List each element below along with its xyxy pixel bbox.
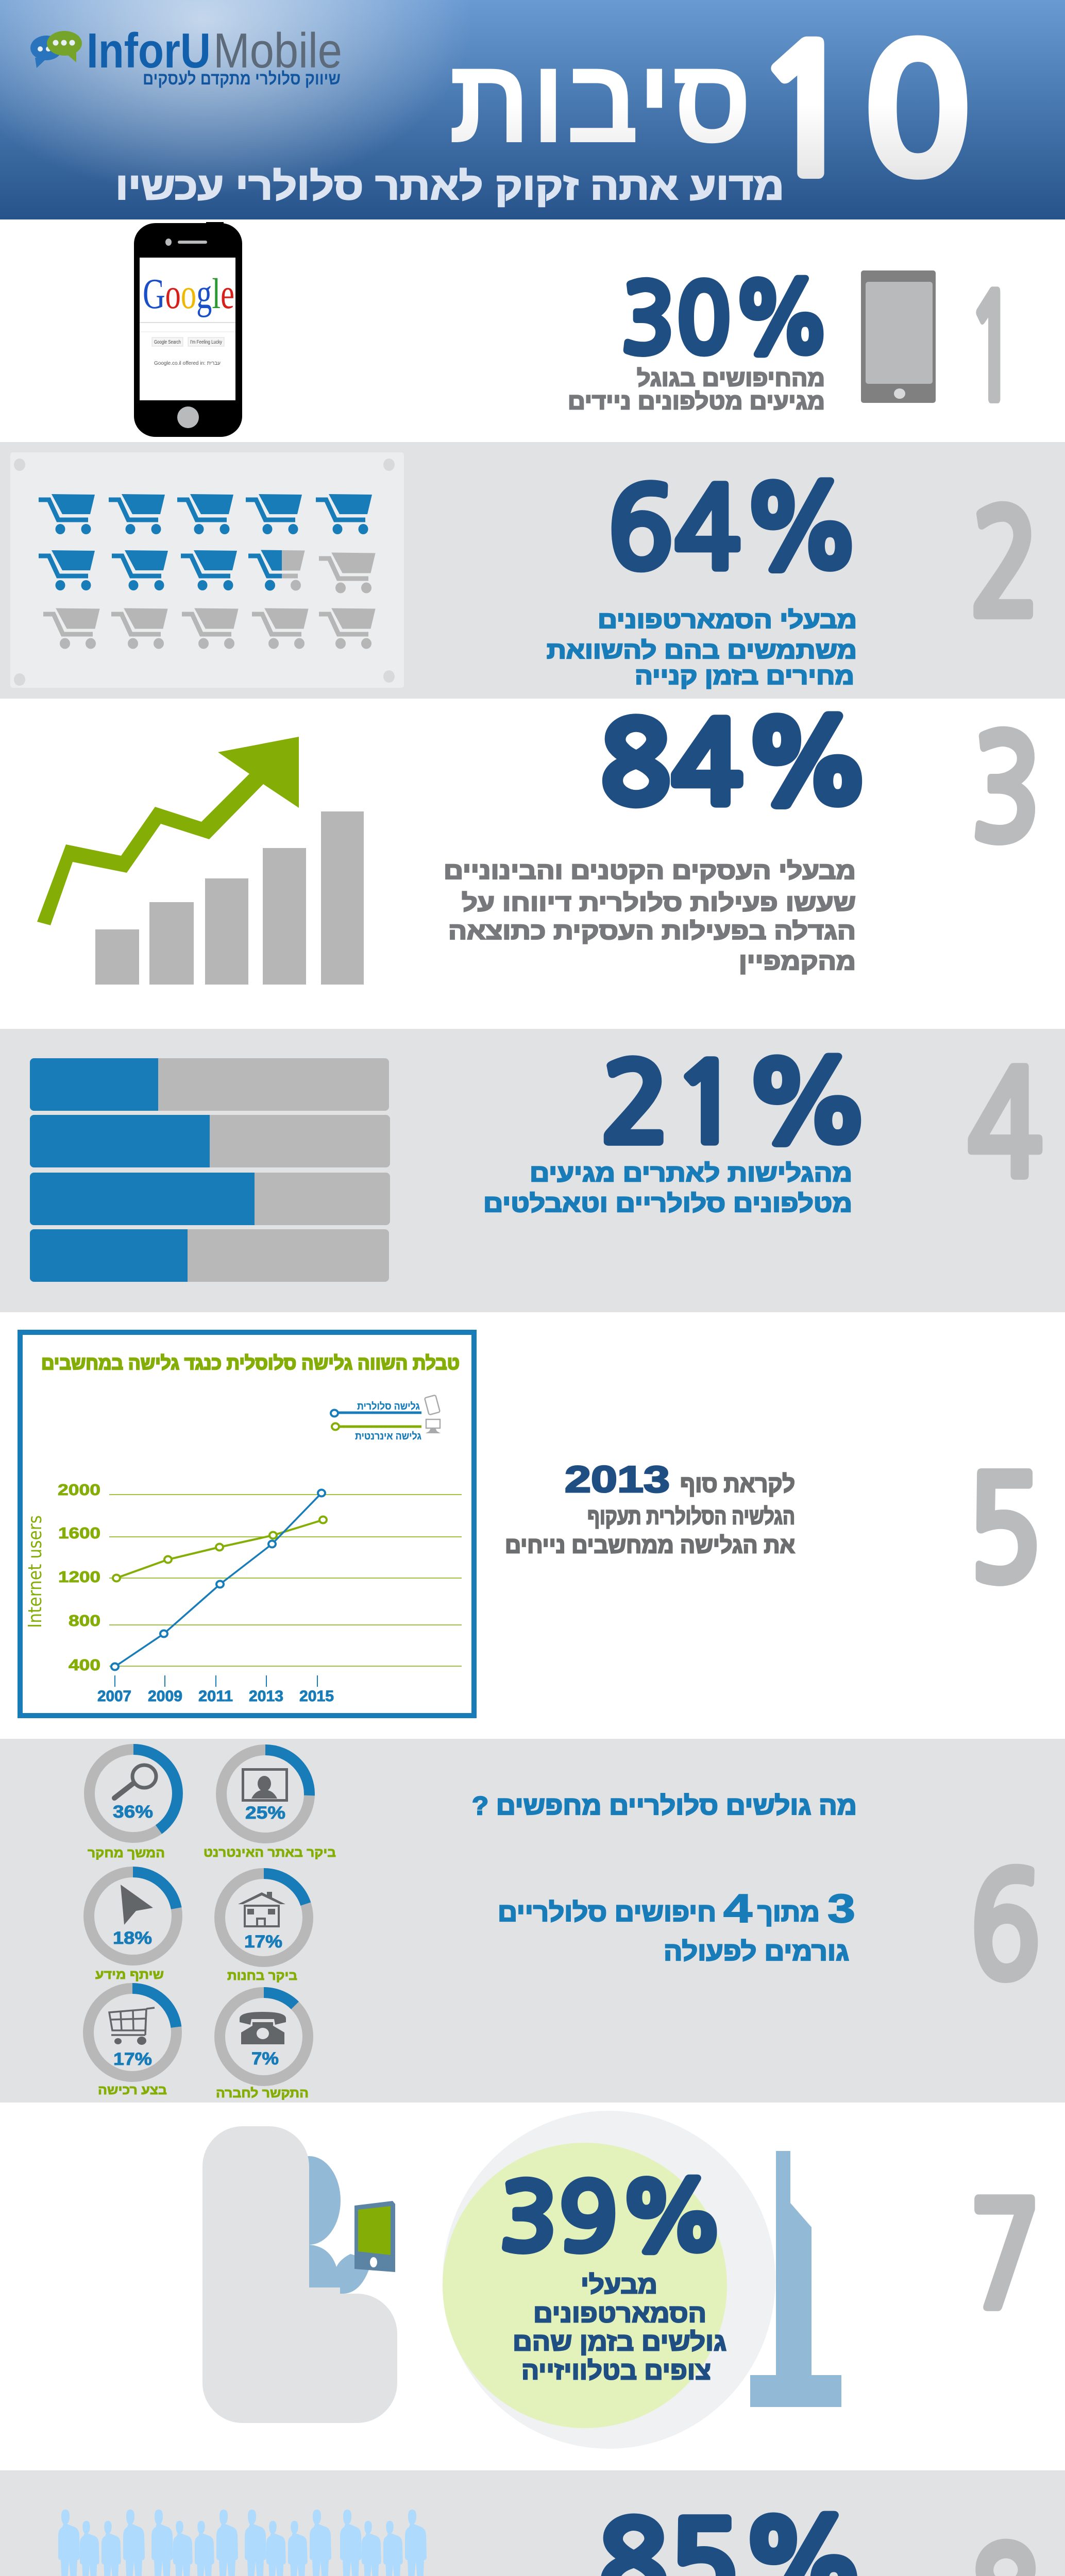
donut: 7% called a company: 7% bbox=[251, 2049, 279, 2069]
series: mobile bbox=[111, 1490, 325, 1670]
panel: reason 7 bbox=[0, 2103, 1065, 2470]
icon: crowd of people bbox=[56, 2510, 427, 2576]
donut: 17% made a purchase: בצע רכישה bbox=[98, 2083, 167, 2097]
y axis labels: 1600 bbox=[58, 1524, 100, 1542]
text block: reason 2: מחירים בזמן קנייה bbox=[635, 663, 854, 689]
text block: reason 5: 2013 bbox=[565, 1459, 670, 1500]
statistic: 39%: 39% bbox=[499, 2173, 725, 2265]
donut: 18% shared information: שיתף מידע bbox=[95, 1968, 164, 1982]
text block: reason 3: שעשו פעילות סלולרית דיווחו על bbox=[462, 889, 856, 916]
text block: reason 2 bbox=[547, 606, 857, 689]
text block: reason 7: צופים בטלוויזייה bbox=[521, 2357, 711, 2385]
statistic: 84%: 84% bbox=[600, 709, 872, 821]
chart title: טבלת השווה גלישה סלוסלית כנגד גלישה במחשבים bbox=[41, 1352, 460, 1374]
x axis labels: 2011 bbox=[198, 1688, 233, 1705]
text block: reason 4: מטלפונים סלולריים וטאבלטים bbox=[483, 1190, 852, 1217]
text block: reason 5 bbox=[505, 1459, 795, 1558]
panel: reason 3 bbox=[0, 699, 1065, 1029]
donut: 7% called a company: התקשר לחברה bbox=[216, 2086, 309, 2100]
text block: 3 of 4 searches: 4 bbox=[723, 1886, 752, 1931]
title: 10 reasons bbox=[448, 26, 973, 201]
text block: 3 of 4 searches: מתוך bbox=[757, 1898, 820, 1927]
panel: reason 1 bbox=[0, 219, 1065, 442]
icon: phone with Google search: Google bbox=[143, 270, 234, 318]
donut: 17% visited store bbox=[219, 1873, 308, 1983]
text block: reason 1: מגיעים מטלפונים ניידים bbox=[568, 389, 825, 414]
panel: reason 2 bbox=[0, 442, 1065, 699]
y axis labels bbox=[58, 1481, 100, 1674]
logo: InforUMobile header bbox=[30, 23, 342, 89]
text block: reason 7: הסמארטפונים bbox=[533, 2300, 706, 2328]
panel: reason 8 bbox=[0, 2470, 1065, 2576]
panel: reason 5 bbox=[0, 1312, 1065, 1739]
text block: 3 of 4 searches: 3 bbox=[827, 1886, 855, 1931]
text block: reason 2: מבעלי הסמארטפונים bbox=[598, 606, 857, 633]
title: 10 reasons: 10 bbox=[751, 26, 973, 201]
number 6: 6 bbox=[969, 1856, 1042, 2001]
donut: 18% shared information bbox=[89, 1872, 177, 1982]
x axis labels: 2009 bbox=[148, 1688, 182, 1705]
grid lines bbox=[109, 1495, 462, 1666]
donut: 17% made a purchase: 17% bbox=[113, 2049, 152, 2069]
donut: 36% continued research: המשך מחקר bbox=[88, 1846, 165, 1860]
panel: reason 6 bbox=[0, 1739, 1065, 2103]
text block: reason 5: את הגלישה ממחשבים נייחים bbox=[505, 1533, 795, 1558]
subtitle: מדוע אתה זקוק לאתר סלולרי עכשיו bbox=[115, 165, 784, 208]
number 7: 7 bbox=[969, 2185, 1042, 2330]
y axis labels: 400 bbox=[69, 1656, 100, 1674]
y axis title: Internet users bbox=[25, 1515, 46, 1628]
illustration: circles bbox=[443, 2111, 775, 2449]
panel: header banner bbox=[0, 0, 1065, 219]
number 4: 4 bbox=[967, 1054, 1044, 1199]
number 1: 1 bbox=[967, 277, 1018, 422]
logo: InforUMobile header: Mobile bbox=[213, 23, 342, 78]
text block: reason 3: הגדלה בפעילות העסקית כתוצאה bbox=[448, 918, 856, 944]
text block: reason 1 bbox=[568, 366, 825, 414]
panel: reason 4 bbox=[0, 1029, 1065, 1312]
text block: reason 5: לקראת סוף bbox=[680, 1470, 795, 1497]
y axis labels: 800 bbox=[69, 1612, 100, 1630]
icon: grey phone bbox=[861, 270, 936, 403]
title: 10 reasons: סיבות bbox=[448, 32, 752, 168]
text block: reason 7 bbox=[513, 2271, 726, 2385]
x axis labels: 2007 bbox=[97, 1688, 131, 1705]
illustration: person on couch with phone bbox=[202, 2126, 397, 2423]
bar chart: growth bbox=[95, 811, 364, 985]
text block: 3 of 4 searches: חיפושים סלולריים bbox=[498, 1898, 716, 1927]
text block: reason 3: מהקמפיין bbox=[739, 948, 856, 975]
panel: shopping carts board bbox=[10, 452, 404, 688]
icon: phone with Google search bbox=[134, 222, 242, 437]
number 5: 5 bbox=[966, 1459, 1043, 1604]
arrow: green growth bbox=[37, 737, 299, 925]
donut: 17% made a purchase bbox=[89, 1989, 176, 2097]
donut: 36% continued research bbox=[88, 1750, 177, 1860]
donut: 17% visited store: 17% bbox=[244, 1932, 282, 1952]
text block: reason 4: מהגלישות לאתרים מגיעים bbox=[530, 1159, 852, 1187]
text block: reason 1: מהחיפושים בגוגל bbox=[637, 366, 825, 391]
text block: reason 7: גולשים בזמן שהם bbox=[513, 2328, 726, 2356]
donut: 25% visited website bbox=[204, 1750, 336, 1860]
x axis labels: 2015 bbox=[299, 1688, 334, 1705]
illustration: television stand bbox=[750, 2151, 841, 2407]
statistic: 30%: 30% bbox=[620, 273, 832, 368]
text block: reason 3 bbox=[444, 857, 856, 975]
series: desktop bbox=[113, 1517, 327, 1582]
text block: reason 5: הגלשיה הסלולרית תעקוף bbox=[587, 1504, 795, 1529]
donut: 17% visited store: ביקר בחנות bbox=[227, 1969, 297, 1983]
donut: 36% continued research: 36% bbox=[113, 1802, 153, 1822]
line chart: mobile vs desktop bbox=[20, 1332, 474, 1716]
number 3: 3 bbox=[970, 718, 1043, 863]
donut: 7% called a company bbox=[216, 1993, 309, 2100]
icon: phone with Google search: I'm Feeling Lucky bbox=[190, 340, 222, 345]
heading: what mobile surfers search: מה גולשים סלולריים מחפשים ? bbox=[472, 1791, 857, 1820]
text block: reason 7: מבעלי bbox=[581, 2271, 657, 2299]
legend bbox=[331, 1395, 441, 1442]
logo: InforUMobile header: InforU bbox=[87, 23, 211, 78]
x axis labels: 2013 bbox=[249, 1688, 283, 1705]
icon: phone with Google search: Google Search bbox=[154, 340, 181, 345]
icon: phone with Google search: Google.co.il offered in: עברית bbox=[154, 361, 221, 366]
text block: 3 of 4 searches: גורמים לפעולה bbox=[664, 1937, 849, 1966]
x axis ticks bbox=[115, 1675, 317, 1687]
number 2: 2 bbox=[969, 493, 1042, 638]
y axis labels: 2000 bbox=[58, 1481, 100, 1499]
donut: 25% visited website: 25% bbox=[245, 1803, 285, 1823]
legend: גלישה אינרנטית bbox=[355, 1431, 421, 1442]
statistic: 21%: 21% bbox=[600, 1050, 872, 1160]
text block: reason 4 bbox=[483, 1159, 852, 1217]
text block: 3 of 4 searches bbox=[498, 1886, 855, 1966]
donut: 18% shared information: 18% bbox=[113, 1928, 152, 1948]
logo: InforUMobile header: שיווק סלולרי מתקדם לעסקים bbox=[143, 69, 341, 89]
text block: reason 3: מבעלי העסקים הקטנים והבינוניים bbox=[444, 857, 856, 884]
statistic: 64%: 64% bbox=[607, 474, 862, 586]
x axis labels bbox=[97, 1688, 334, 1705]
progress bars bbox=[30, 1058, 390, 1282]
y axis labels: 1200 bbox=[58, 1568, 100, 1586]
donut: 25% visited website: ביקר באתר האינטרנט bbox=[204, 1845, 336, 1860]
text block: reason 2: משתמשים בהם להשוואת bbox=[547, 637, 857, 664]
legend: גלישה סלולרית bbox=[357, 1401, 420, 1412]
